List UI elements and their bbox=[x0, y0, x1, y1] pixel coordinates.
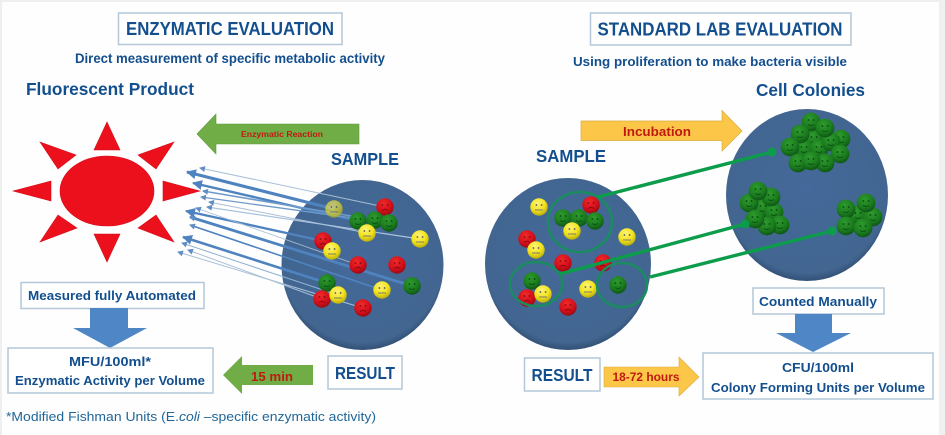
title: standard lab evaluation bbox=[590, 13, 851, 45]
label: sample right: SAMPLE bbox=[536, 146, 606, 166]
arrow: incubation bbox=[581, 110, 742, 151]
arrows: fluorescence emitted toward sun bbox=[178, 168, 420, 308]
box: MFU result: MFU/100ml* bbox=[69, 355, 151, 369]
box: counted manually bbox=[753, 288, 884, 314]
bacteria: mixed sample bbox=[313, 198, 429, 317]
arrow: 15 min bbox=[223, 356, 313, 394]
title: standard lab evaluation: STANDARD LAB EVALUATION bbox=[598, 18, 842, 40]
arrow: 18-72 hours bbox=[604, 357, 699, 396]
arrow: 18-72 hours: 18-72 hours bbox=[612, 372, 680, 384]
box: measured fully automated bbox=[21, 282, 204, 308]
heading: cell colonies: Cell Colonies bbox=[756, 80, 865, 100]
box: counted manually: Counted Manually bbox=[759, 295, 877, 309]
subtitle: direct measurement: Direct measurement of specific metabolic activity bbox=[75, 51, 385, 66]
box: CFU result: Colony Forming Units per Volume bbox=[711, 381, 925, 395]
panel: enzymatic evaluation bbox=[6, 13, 444, 424]
icon: red fluorescent sun bbox=[13, 122, 200, 262]
title: enzymatic evaluation bbox=[118, 13, 342, 44]
box: MFU result: Enzymatic Activity per Volume bbox=[15, 374, 205, 388]
box: result left bbox=[328, 356, 402, 389]
box: MFU result bbox=[8, 348, 213, 393]
colony: lower left bbox=[740, 182, 789, 235]
arrow: incubation: Incubation bbox=[623, 125, 691, 139]
label: sample left: SAMPLE bbox=[331, 149, 399, 169]
bacteria: mixed sample bbox=[518, 196, 636, 316]
panel: standard lab evaluation bbox=[485, 13, 933, 399]
colony: lower right bbox=[837, 194, 882, 237]
heading: fluorescent product: Fluorescent Product bbox=[26, 79, 194, 99]
box: CFU result bbox=[703, 353, 933, 399]
box: result right: RESULT bbox=[532, 365, 593, 385]
footnote: *Modified Fishman Units (E. coli –specific enzymatic activity) bbox=[6, 410, 376, 424]
arrow: enzymatic reaction bbox=[197, 114, 359, 154]
colony dish bbox=[726, 109, 888, 281]
colony: top bbox=[781, 113, 850, 172]
arrow: down to MFU bbox=[73, 308, 147, 348]
box: result right bbox=[524, 358, 600, 391]
title: enzymatic evaluation: ENZYMATIC EVALUATION bbox=[126, 18, 334, 39]
arrow: enzymatic reaction: Enzymatic Reaction bbox=[241, 130, 323, 139]
sample dish with bacteria bbox=[178, 168, 444, 350]
box: measured fully automated: Measured fully Automated bbox=[28, 289, 196, 303]
green selection rings and connector lines bbox=[510, 148, 836, 307]
sample dish with highlighted E. coli bbox=[485, 178, 651, 350]
arrow: down to CFU bbox=[776, 314, 851, 352]
box: result left: RESULT bbox=[335, 363, 395, 383]
box: CFU result: CFU/100ml bbox=[782, 361, 854, 375]
subtitle: using proliferation: Using proliferation to make bacteria visible bbox=[573, 54, 847, 69]
arrow: 15 min: 15 min bbox=[251, 370, 293, 384]
